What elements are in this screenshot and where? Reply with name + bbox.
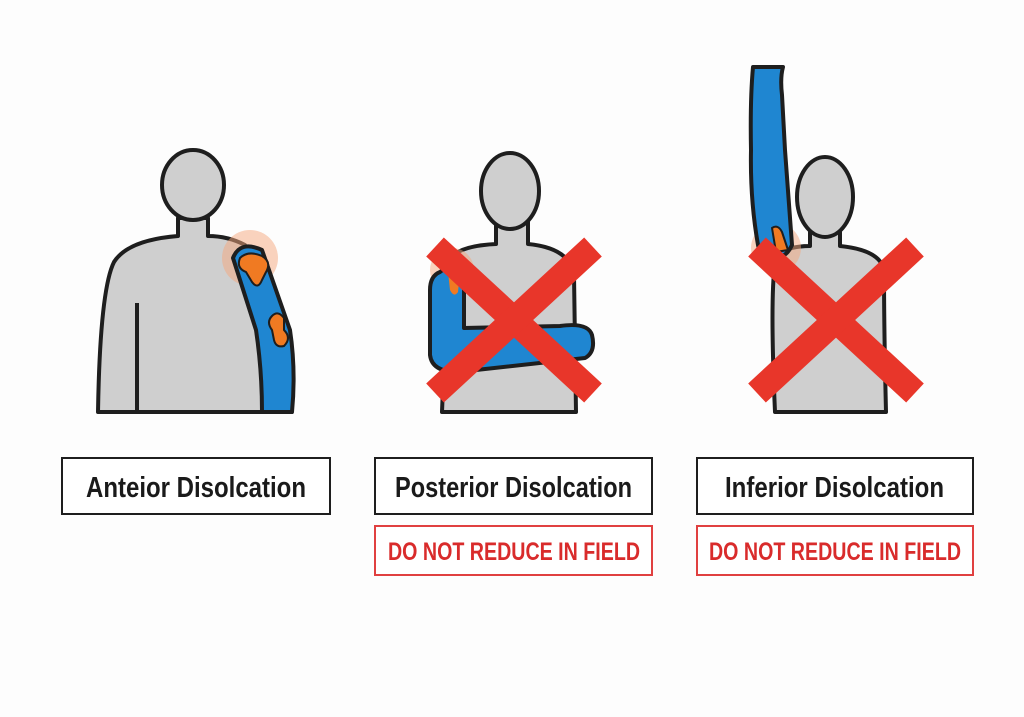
label: anterior — [62, 458, 330, 514]
red X: inferior — [757, 247, 915, 393]
warning: inferior — [697, 526, 973, 575]
warning: posterior — [375, 526, 652, 575]
label: anterior: Anteior Disolcation — [86, 472, 306, 504]
warning: posterior: DO NOT REDUCE IN FIELD — [388, 538, 640, 566]
label: posterior — [375, 458, 652, 514]
head — [162, 150, 224, 220]
body — [98, 218, 272, 412]
glow — [222, 230, 278, 286]
label: inferior: Inferior Disolcation — [725, 472, 944, 504]
label: inferior — [697, 458, 973, 514]
figure: anterior dislocation — [98, 150, 294, 412]
label: posterior: Posterior Disolcation — [395, 472, 632, 504]
blue arm — [233, 246, 294, 412]
warning: inferior: DO NOT REDUCE IN FIELD — [709, 538, 961, 566]
figure: inferior dislocation — [751, 67, 886, 412]
bones — [239, 253, 268, 286]
red X: posterior — [435, 247, 593, 393]
figure: posterior dislocation — [430, 153, 593, 412]
